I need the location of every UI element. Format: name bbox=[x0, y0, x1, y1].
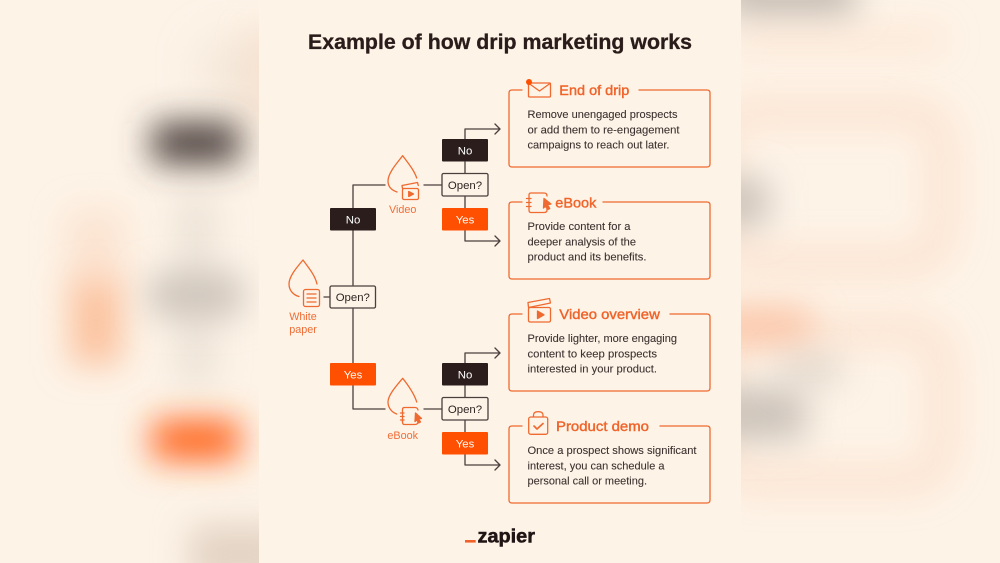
open decision: root: Open? bbox=[336, 292, 370, 304]
text: product demo: interest, you can schedule a bbox=[528, 460, 665, 472]
panel: end of drip bbox=[509, 79, 710, 167]
label: ebook: eBook bbox=[387, 430, 419, 442]
zapier logo: zapier bbox=[478, 526, 536, 547]
title: Example of how drip marketing works bbox=[308, 30, 692, 54]
flowchart connectors bbox=[324, 124, 500, 470]
icon: clapperboard bbox=[528, 298, 550, 322]
heading: ebook: eBook bbox=[555, 195, 596, 210]
label: video: Video bbox=[389, 204, 416, 216]
text: video overview: Provide lighter, more engaging bbox=[528, 333, 677, 345]
yes tag: upper: Yes bbox=[456, 214, 475, 226]
panel: ebook bbox=[509, 193, 710, 279]
icon: video drop bbox=[388, 156, 418, 200]
no tag: upper: No bbox=[458, 146, 472, 158]
text: end of drip: or add them to re-engagement bbox=[528, 124, 680, 136]
center panel bbox=[259, 0, 741, 563]
no tag: root bbox=[330, 208, 376, 230]
panel: video overview bbox=[509, 298, 710, 391]
text: product demo: personal call or meeting. bbox=[528, 476, 647, 488]
video node bbox=[388, 156, 418, 216]
text: end of drip: campaigns to reach out later. bbox=[528, 140, 670, 152]
text: ebook: Provide content for a bbox=[528, 221, 631, 233]
open decision: upper: Open? bbox=[448, 180, 482, 192]
icon: white paper drop bbox=[289, 260, 320, 306]
panel: product demo bbox=[509, 412, 710, 503]
text: video overview: content to keep prospects bbox=[528, 348, 657, 360]
icon: envelope bbox=[526, 79, 550, 97]
no tag: lower: No bbox=[458, 370, 472, 382]
open decision: root bbox=[330, 286, 376, 308]
text: video overview: interested in your product. bbox=[528, 364, 657, 376]
open decision: lower: Open? bbox=[448, 404, 482, 416]
text: ebook: product and its benefits. bbox=[528, 252, 646, 264]
heading: product demo: Product demo bbox=[556, 419, 649, 434]
icon: ebook bbox=[526, 193, 551, 212]
yes tag: root bbox=[330, 363, 376, 386]
icon: shopping bag with check bbox=[529, 412, 548, 434]
upper decision bbox=[442, 139, 488, 230]
text: ebook: deeper analysis of the bbox=[528, 236, 636, 248]
heading: video overview: Video overview bbox=[559, 307, 660, 322]
text: product demo: Once a prospect shows significant bbox=[528, 445, 697, 457]
lower decision bbox=[442, 363, 488, 454]
label: white paper: White bbox=[289, 311, 317, 323]
label: white paper: paper bbox=[289, 324, 317, 336]
no tag: root: No bbox=[346, 214, 360, 226]
white paper node bbox=[289, 260, 320, 336]
ebook node bbox=[387, 378, 422, 442]
text: end of drip: Remove unengaged prospects bbox=[528, 109, 678, 121]
icon: ebook drop bbox=[388, 378, 422, 424]
blurred backdrop: left bbox=[66, 30, 290, 563]
blurred backdrop: right bbox=[710, 0, 945, 480]
heading: end of drip: End of drip bbox=[559, 83, 630, 98]
yes tag: root: Yes bbox=[344, 370, 363, 382]
yes tag: lower: Yes bbox=[456, 438, 475, 450]
